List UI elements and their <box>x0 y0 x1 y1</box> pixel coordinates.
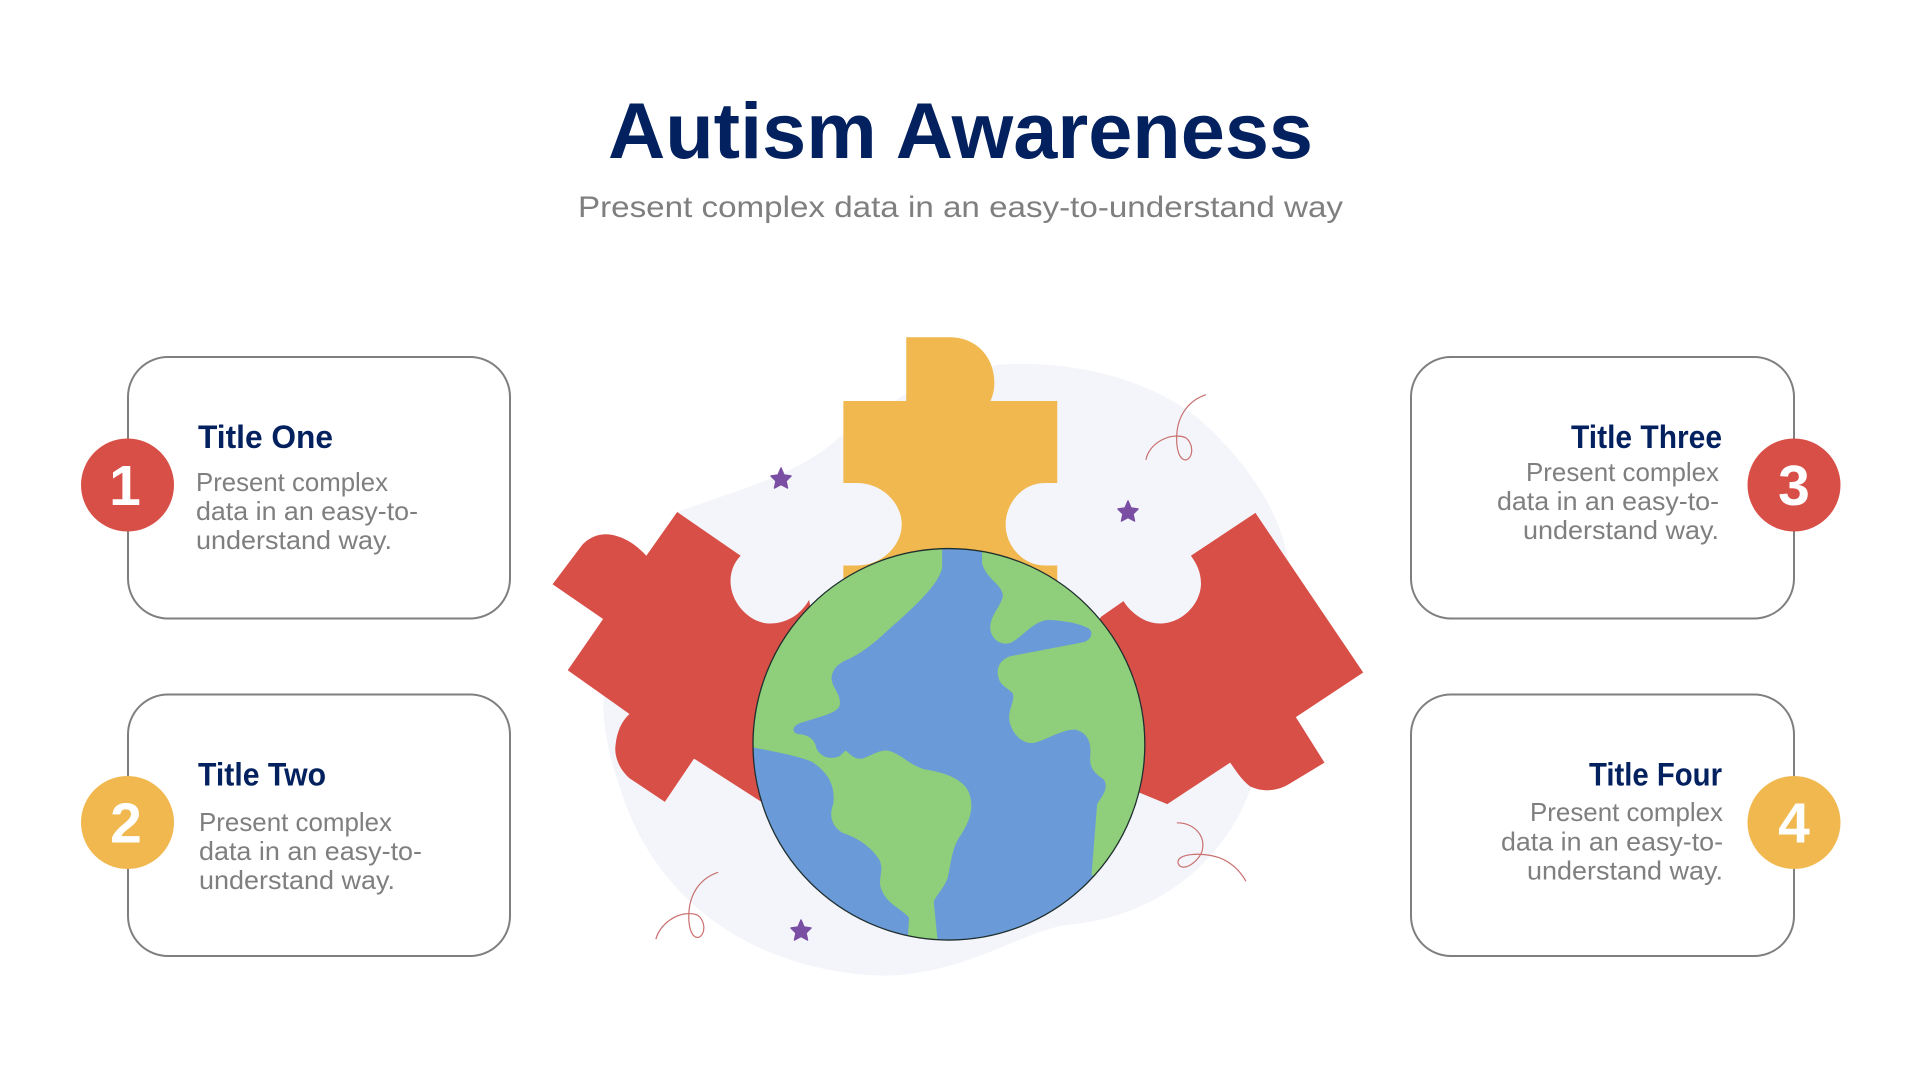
badge 3: 3 <box>1778 454 1810 518</box>
text: body four: Present complex <box>1530 797 1723 827</box>
panel: card two <box>81 694 510 956</box>
text: body two: Present complex <box>199 807 392 837</box>
land: east <box>982 552 1144 876</box>
scribble: bottom left <box>656 872 718 939</box>
text: body two: understand way. <box>199 865 395 895</box>
text: body two <box>199 807 422 895</box>
badge 1 <box>81 438 174 532</box>
illustration: globe with puzzle pieces <box>553 337 1363 976</box>
badge 4 <box>1748 776 1840 869</box>
text: body four: understand way. <box>1527 856 1723 886</box>
badge 3 <box>1748 438 1840 532</box>
heading: title one: Title One <box>198 419 333 455</box>
text: body three: understand way. <box>1523 515 1719 545</box>
text: body one <box>196 467 418 555</box>
globe <box>752 548 1146 941</box>
star: upper right <box>1118 501 1138 521</box>
subtitle: Present complex data in an easy-to-understand way <box>578 191 1343 224</box>
panel: card one <box>81 357 510 618</box>
star: bottom <box>791 920 811 940</box>
panel: card four <box>1411 694 1840 956</box>
background blob <box>603 364 1295 976</box>
star: upper left <box>771 468 791 488</box>
scribble: bottom right <box>1177 823 1246 881</box>
text: body four <box>1501 797 1723 886</box>
text: body four: data in an easy-to- <box>1501 826 1723 856</box>
title: Autism Awareness <box>608 86 1313 175</box>
heading: title two: Title Two <box>198 756 326 792</box>
badge 2 <box>81 776 174 869</box>
text: body three <box>1497 457 1719 545</box>
heading: title three: Title Three <box>1571 419 1722 455</box>
text: body three: Present complex <box>1526 457 1719 487</box>
text: body one: understand way. <box>196 525 392 555</box>
text: body two: data in an easy-to- <box>199 836 422 866</box>
badge 1: 1 <box>109 454 141 518</box>
puzzle piece: yellow <box>843 337 1057 594</box>
badge 4: 4 <box>1778 792 1810 856</box>
badge 2: 2 <box>110 792 142 856</box>
puzzle piece: red right <box>1025 513 1363 804</box>
text: body one: Present complex <box>196 467 388 497</box>
puzzle piece: red left <box>553 512 834 802</box>
text: body one: data in an easy-to- <box>196 496 418 526</box>
text: body three: data in an easy-to- <box>1497 486 1719 516</box>
scribble: top right <box>1146 395 1206 460</box>
panel: card three <box>1411 357 1840 618</box>
land: west <box>754 549 972 939</box>
heading: title four: Title Four <box>1589 756 1722 792</box>
